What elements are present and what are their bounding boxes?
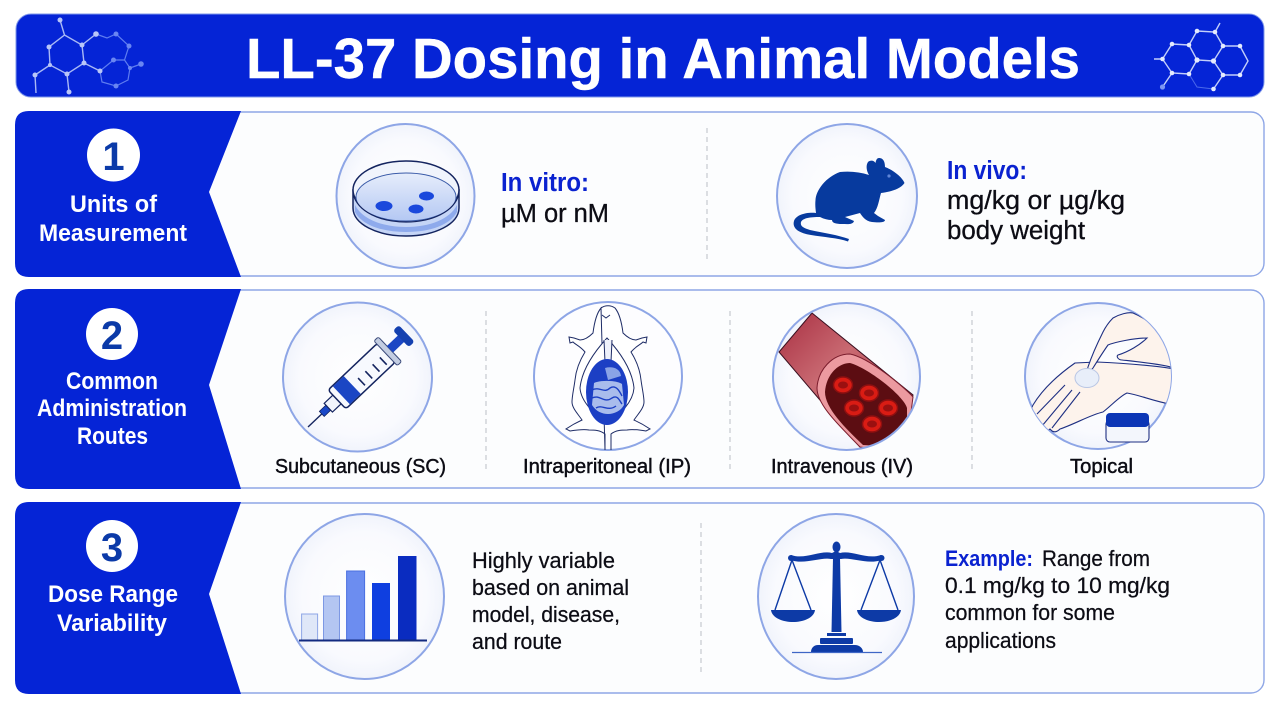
text: example <box>945 546 1170 653</box>
icon: mouse <box>777 124 917 268</box>
text: in vivo: mg/kg or µg/kg <box>947 187 1125 215</box>
text: example: applications <box>945 628 1056 653</box>
text: in vivo <box>947 157 1125 245</box>
heading 1: Measurement <box>39 220 187 247</box>
label: topical: Topical <box>1070 455 1133 478</box>
heading 2 <box>37 368 187 450</box>
heading 2: Administration <box>37 395 187 422</box>
text: in vitro: µM or nM <box>501 200 609 228</box>
icon: petri dish <box>336 124 474 268</box>
heading 1: Units of <box>70 191 158 218</box>
heading 2: Common <box>66 368 158 395</box>
text: variability: based on animal <box>472 575 629 600</box>
icon: molecule left <box>32 18 144 94</box>
icon: topical application <box>1025 303 1175 449</box>
text: variability: and route <box>472 629 562 654</box>
number badge 3 <box>86 520 138 572</box>
text: variability: Highly variable <box>472 548 615 573</box>
text: variability: model, disease, <box>472 602 620 627</box>
heading 3: Dose Range <box>48 581 178 608</box>
label: intraperitoneal: Intraperitoneal (IP) <box>523 455 691 478</box>
label: subcutaneous: Subcutaneous (SC) <box>275 455 446 478</box>
text: in vivo: body weight <box>947 217 1085 245</box>
panel 2: administration routes <box>15 289 1264 489</box>
heading 3 <box>48 581 178 637</box>
number badge 1 <box>87 128 140 182</box>
number badge 3: 3 <box>101 526 123 570</box>
panel 1: units of measurement <box>15 111 1264 277</box>
icon: syringe <box>283 302 432 452</box>
text: in vitro <box>501 169 609 228</box>
text: in vitro: In vitro: <box>501 169 589 197</box>
section header 1 <box>15 111 241 277</box>
icon: balance scale <box>758 514 914 679</box>
text: example: Range from <box>1042 546 1150 571</box>
heading 2: Routes <box>77 423 148 450</box>
label: intravenous: Intravenous (IV) <box>771 455 913 478</box>
section header 3 <box>15 502 241 694</box>
title text: LL-37 Dosing in Animal Models <box>246 27 1080 91</box>
number badge 1: 1 <box>102 135 125 179</box>
text: in vivo: In vivo: <box>947 157 1027 185</box>
number badge 2 <box>86 308 138 360</box>
icon: mouse abdomen <box>534 302 682 450</box>
text: variability <box>472 548 629 654</box>
number badge 2: 2 <box>101 314 123 358</box>
bar chart icon <box>285 514 444 679</box>
panel 3: dose range variability <box>15 502 1264 694</box>
title banner <box>16 14 1264 97</box>
text: example: common for some <box>945 600 1115 625</box>
heading 3: Variability <box>57 610 168 637</box>
text: example: Example: <box>945 546 1033 571</box>
icon: molecule right <box>1154 23 1248 91</box>
icon: blood vessel <box>773 303 920 452</box>
heading 1 <box>39 191 187 247</box>
section header 2 <box>15 289 241 489</box>
text: example: 0.1 mg/kg to 10 mg/kg <box>945 573 1170 598</box>
